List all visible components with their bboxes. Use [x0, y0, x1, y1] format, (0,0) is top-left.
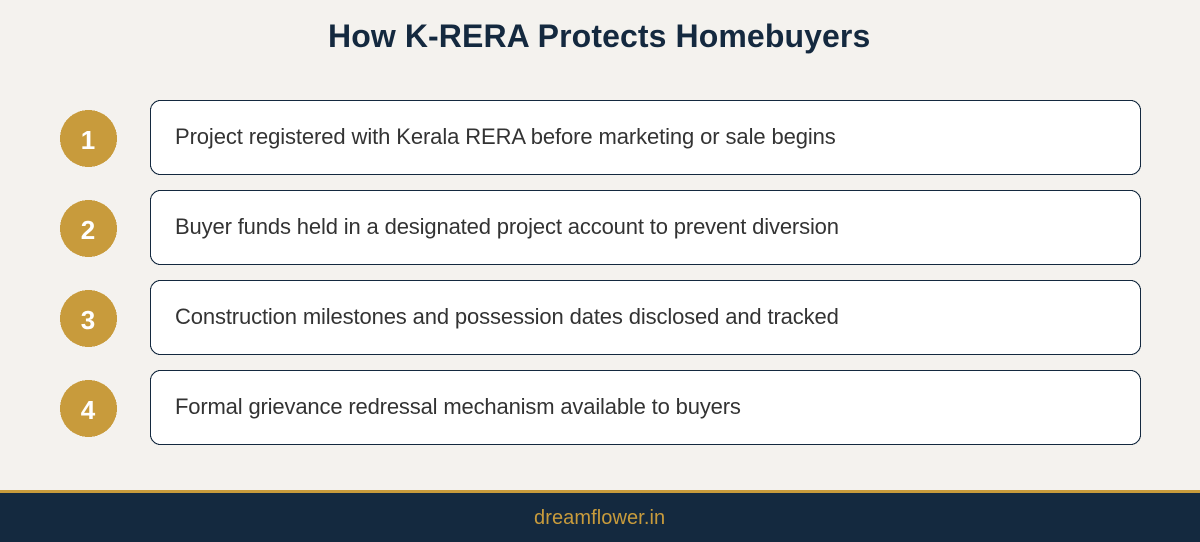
- step 3: [60, 280, 1141, 355]
- step 3 number badge: [60, 290, 117, 347]
- step 4 card: Formal grievance redressal mechanism available to buyers: [175, 394, 741, 419]
- step 4 number badge: 4: [81, 395, 95, 425]
- title: How K-RERA Protects Homebuyers: [328, 18, 870, 54]
- step 2 number badge: 2: [81, 215, 95, 245]
- step 2 card: [150, 190, 1141, 265]
- step 4: [60, 370, 1141, 445]
- step 4 number badge: [60, 380, 117, 437]
- step 4 card: [150, 370, 1141, 445]
- footer website text: dreamflower.in: [534, 507, 665, 529]
- footer band: [0, 490, 1200, 542]
- step 1 card: Project registered with Kerala RERA before marketing or sale begins: [175, 124, 836, 149]
- step 3 card: [150, 280, 1141, 355]
- step 3 card: Construction milestones and possession dates disclosed and tracked: [175, 304, 839, 329]
- step 1 number badge: [60, 110, 117, 167]
- step 2 number badge: [60, 200, 117, 257]
- step 1 card: [150, 100, 1141, 175]
- step 1: [60, 100, 1141, 175]
- step 2 card: Buyer funds held in a designated project account to prevent diversion: [175, 214, 839, 239]
- step 3 number badge: 3: [81, 305, 95, 335]
- step 1 number badge: 1: [81, 125, 95, 155]
- step 2: [60, 190, 1141, 265]
